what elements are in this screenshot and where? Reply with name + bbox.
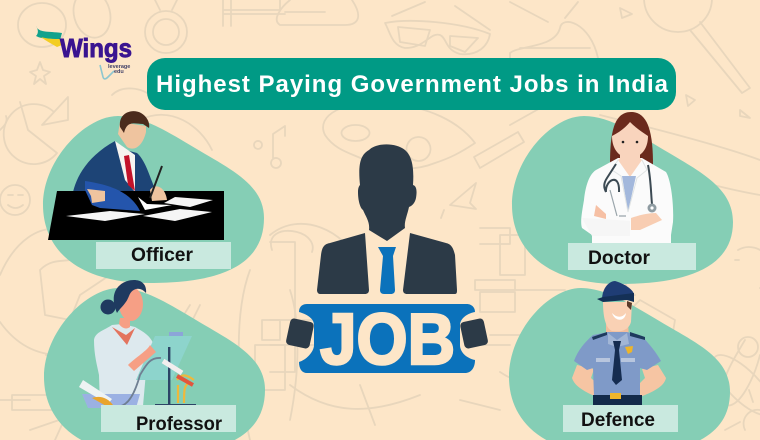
wordmark: Wings xyxy=(60,33,132,63)
blob xyxy=(44,288,265,440)
label box xyxy=(568,243,696,270)
silhouette head xyxy=(358,144,417,241)
label box: Professor xyxy=(136,414,223,435)
right hand xyxy=(460,318,489,349)
title banner: Highest Paying Government Jobs in India xyxy=(156,71,669,98)
panel: defence xyxy=(509,281,730,440)
logo: Wings by Leverage Edu xyxy=(36,26,132,79)
illustration: officer at desk xyxy=(48,111,224,240)
title banner xyxy=(147,58,676,110)
label box: Officer xyxy=(131,245,194,266)
label box xyxy=(101,405,236,435)
blob xyxy=(512,116,733,284)
label box xyxy=(563,405,678,432)
label box: Defence xyxy=(581,410,655,431)
leverage edu mark xyxy=(100,64,130,79)
blob xyxy=(509,288,730,440)
illustration: police officer xyxy=(572,281,666,405)
panel: doctor xyxy=(512,112,733,284)
illustration: doctor xyxy=(581,112,673,243)
blob xyxy=(43,116,264,283)
panel: professor xyxy=(44,280,265,440)
icon: logo swoosh xyxy=(36,26,62,47)
tie xyxy=(378,247,396,294)
label box: Doctor xyxy=(588,248,651,269)
leverage edu mark: leverage xyxy=(108,64,130,70)
job banner: JOB xyxy=(320,300,455,380)
center job figure xyxy=(285,144,489,380)
left hand xyxy=(285,318,314,349)
leverage edu mark: edu xyxy=(114,69,124,75)
illustration: scientist in lab xyxy=(79,280,196,408)
label box xyxy=(96,242,231,269)
silhouette jacket left xyxy=(317,233,369,294)
silhouette jacket right xyxy=(403,233,457,294)
panel: officer xyxy=(43,111,264,283)
